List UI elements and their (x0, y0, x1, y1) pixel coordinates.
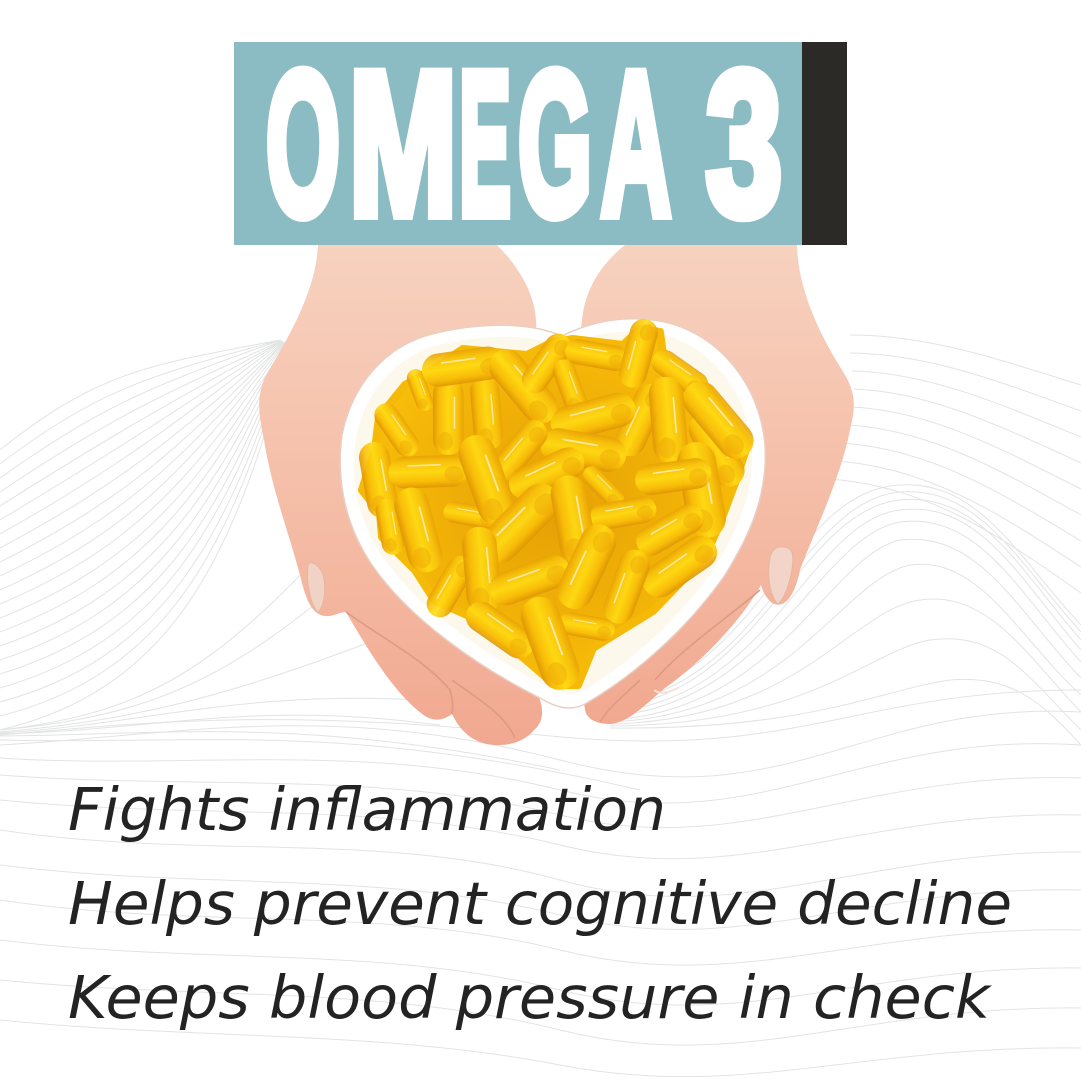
benefit: cognitive decline: Helps prevent cognitive decline (68, 869, 1012, 938)
title: OMEGA 3: O (266, 30, 340, 258)
benefit: fights inflammation: Fights inflammation (68, 775, 666, 844)
right finger creases (600, 590, 760, 722)
right thumb nail (769, 547, 793, 604)
heap base (362, 329, 748, 685)
fingertip nail (654, 688, 678, 693)
title banner (234, 30, 847, 258)
banner dark side bar (802, 42, 847, 245)
heart dish (340, 319, 765, 708)
title: OMEGA 3: E (459, 30, 511, 258)
left thumb nail (307, 563, 325, 612)
banner teal panel (234, 42, 802, 245)
capsule heap (357, 316, 761, 695)
title: OMEGA 3: M (349, 30, 457, 258)
benefits text block (68, 775, 1012, 1032)
title: OMEGA 3: 3 (706, 30, 782, 258)
benefit: blood pressure: Keeps blood pressure in check (68, 963, 993, 1032)
title: OMEGA 3: G (518, 30, 592, 258)
background wave line pattern (0, 335, 1081, 1077)
right hand (560, 245, 854, 724)
dish inner shading (354, 332, 752, 694)
photo: hands holding heart dish of capsules (259, 245, 854, 745)
left hand (259, 245, 560, 745)
title: OMEGA 3: A (601, 30, 671, 258)
left finger creases (346, 612, 515, 738)
